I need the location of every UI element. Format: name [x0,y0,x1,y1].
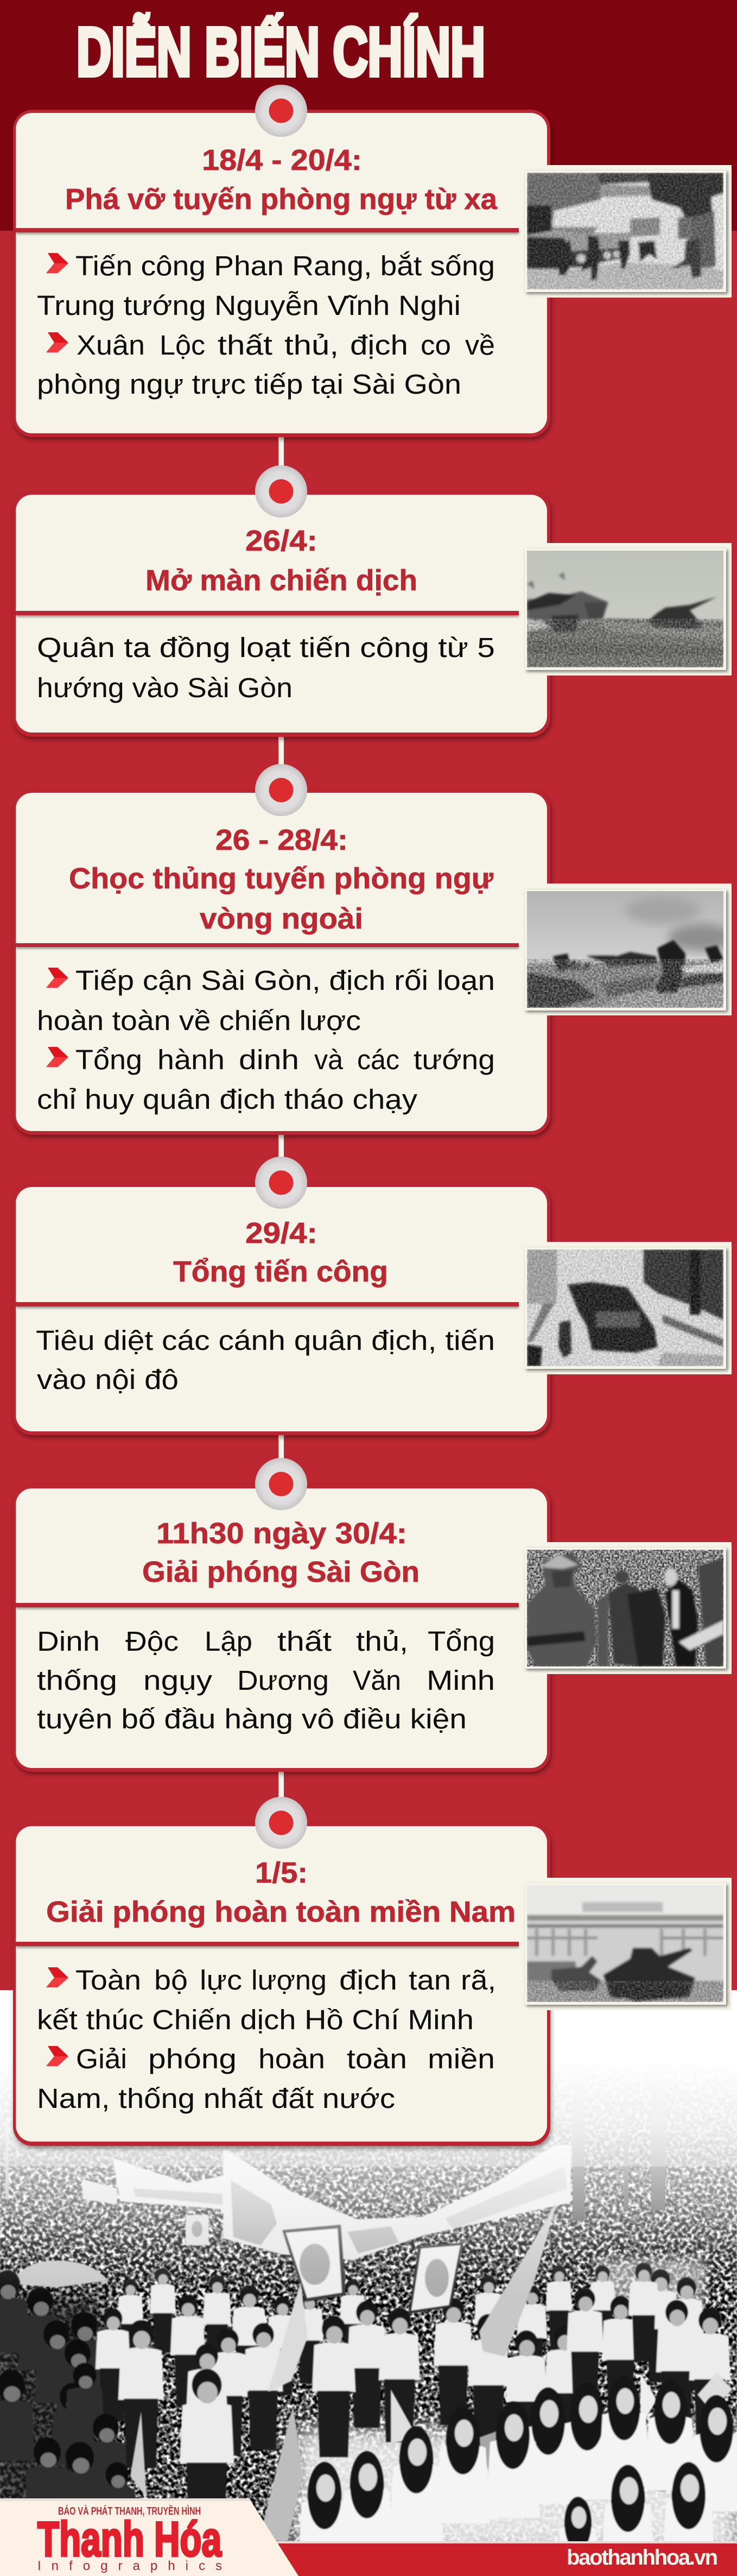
girls in white [297,2376,737,2576]
heading [69,824,494,935]
heading [173,1217,388,1288]
photo frame [525,543,732,675]
divider [16,943,519,947]
body text: ngụy [143,1665,213,1696]
body text [37,250,495,400]
body text: thủ, [356,1626,408,1657]
divider [16,1302,519,1306]
body text: rã, [461,1965,496,1996]
body text: Trung tướng Nguyễn Vĩnh Nghi [37,290,461,321]
heading: 26/4: [245,525,317,557]
heading [145,525,417,597]
body text: thống [37,1665,117,1696]
banners [82,2145,571,2260]
photo: soldiers escorting officials [527,1550,723,1666]
body text: thất [277,1626,332,1657]
body text: tuyên bố đầu hàng vô điều kiện [37,1703,467,1734]
body text: thất [218,330,272,361]
umbrella and small portrait [12,2215,209,2287]
heading: 1/5: [255,1857,308,1889]
panel: 18/4 - 20/4 [13,85,732,437]
portraits [282,2225,463,2314]
heading [65,144,498,216]
body text: hành [157,1044,225,1075]
timeline marker [255,764,307,816]
body text [37,632,495,703]
tonal shading of the crowd [0,2259,737,2558]
body text: dinh [239,1044,299,1075]
body text: thủ, [284,330,339,361]
body text: hướng vào Sài Gòn [37,672,293,703]
crowd men [0,2263,730,2546]
flags [130,2202,733,2541]
photo: tanks entering the city [527,1249,723,1366]
body text: phóng [148,2043,237,2074]
body text: Nam, thống nhất đất nước [37,2083,395,2114]
website address: baothanhhoa.vn [567,2546,718,2569]
body text: Văn [353,1665,401,1696]
panel: 11h30 ngày 30/4 [13,1458,732,1772]
body text: miền [428,2043,495,2074]
body text: Giải [76,2043,127,2074]
divider [16,1942,519,1946]
timeline marker [255,465,307,517]
timeline marker [255,85,307,137]
body text: chỉ huy quân địch tháo chạy [37,1084,418,1115]
footer: red band [277,2541,737,2576]
connector lines [278,434,284,1800]
body text: Tiến công Phan Rang, bắt sống [75,250,495,281]
logo overline: BÁO VÀ PHÁT THANH, TRUYỀN HÌNH [58,2505,201,2517]
body text: và [314,1044,344,1075]
body text: Dương [237,1665,329,1696]
heading: Giải phóng Sài Gòn [142,1556,420,1588]
logo name: Thanh Hóa [37,2512,222,2567]
body text: lượng [251,1965,327,1996]
body text: Độc [125,1626,179,1657]
body text: Tổng [428,1626,495,1657]
photo: tank and running soldiers [527,173,723,289]
heading [142,1517,420,1588]
heading: 18/4 - 20/4: [202,144,362,176]
body text: về [465,330,495,361]
logo subtitle: Infographics [37,2559,222,2573]
body text: toàn [347,2043,407,2074]
body text: co [421,330,451,361]
heading: Chọc thủng tuyến phòng ngự [69,862,494,895]
body text: Minh [427,1665,495,1696]
body text: Lộc [160,330,205,361]
body text: Dinh [37,1626,100,1657]
body text: vào nội đô [37,1364,179,1395]
body text: Tiêu diệt các cánh quân địch, tiến [36,1325,495,1356]
body text: tướng [414,1044,495,1075]
body text [36,1325,495,1395]
photo frame [525,1878,732,2010]
heading: 29/4: [245,1217,317,1249]
body text: hoàn toàn về chiến lược [37,1005,361,1036]
heading: 26 - 28/4: [215,824,348,856]
divider [16,228,519,232]
body text [37,1965,496,2114]
body text: Tổng [75,1044,142,1075]
body text: Xuân [77,330,145,361]
body text: Tiếp cận Sài Gòn, địch rối loạn [75,965,495,996]
heading: 11h30 ngày 30/4: [156,1517,407,1550]
photo: tanks at Independence Palace [527,1885,723,2002]
divider [16,1603,519,1607]
crowd photo [0,2063,737,2576]
heading: Mở màn chiến dịch [145,564,417,597]
photo frame [525,883,733,1015]
timeline marker [255,1157,307,1209]
panel: 29/4 [13,1157,732,1435]
body text: Toàn [75,1965,141,1996]
panel: 1/5 [13,1797,732,2146]
body text: bộ [154,1965,188,1996]
heading: vòng ngoài [200,902,363,935]
body text: Quân ta đồng loạt tiến công từ 5 [37,632,495,663]
body text: các [357,1044,399,1075]
divider [16,611,519,615]
photo frame [525,165,732,298]
body text: địch [339,1965,397,1996]
footer: logo [0,2498,298,2576]
photo: tanks on field [527,551,723,667]
body text: lực [200,1965,242,1996]
panel: 26 - 28/4 [13,764,733,1135]
body text: địch [350,330,408,361]
body text [37,1626,495,1734]
photo: soldiers advancing [527,891,723,1008]
heading [46,1857,516,1928]
photo fade to white [0,2058,737,2297]
panel: 26/4 [13,465,732,737]
body text [37,965,495,1115]
heading: Giải phóng hoàn toàn miền Nam [46,1896,516,1928]
body text: kết thúc Chiến dịch Hồ Chí Minh [37,2004,474,2035]
title: DIỄN BIẾN CHÍNH [77,14,485,90]
timeline marker [255,1458,307,1510]
body text: Lập [205,1626,252,1657]
photo frame [525,1542,732,1674]
body text: tan [409,1965,451,1996]
body text: hoàn [258,2043,325,2074]
heading: Phá vỡ tuyến phòng ngự từ xa [65,183,498,216]
photo frame [525,1242,732,1374]
body text: phòng ngự trực tiếp tại Sài Gòn [37,369,461,400]
timeline marker [255,1797,307,1849]
heading: Tổng tiến công [173,1255,388,1288]
